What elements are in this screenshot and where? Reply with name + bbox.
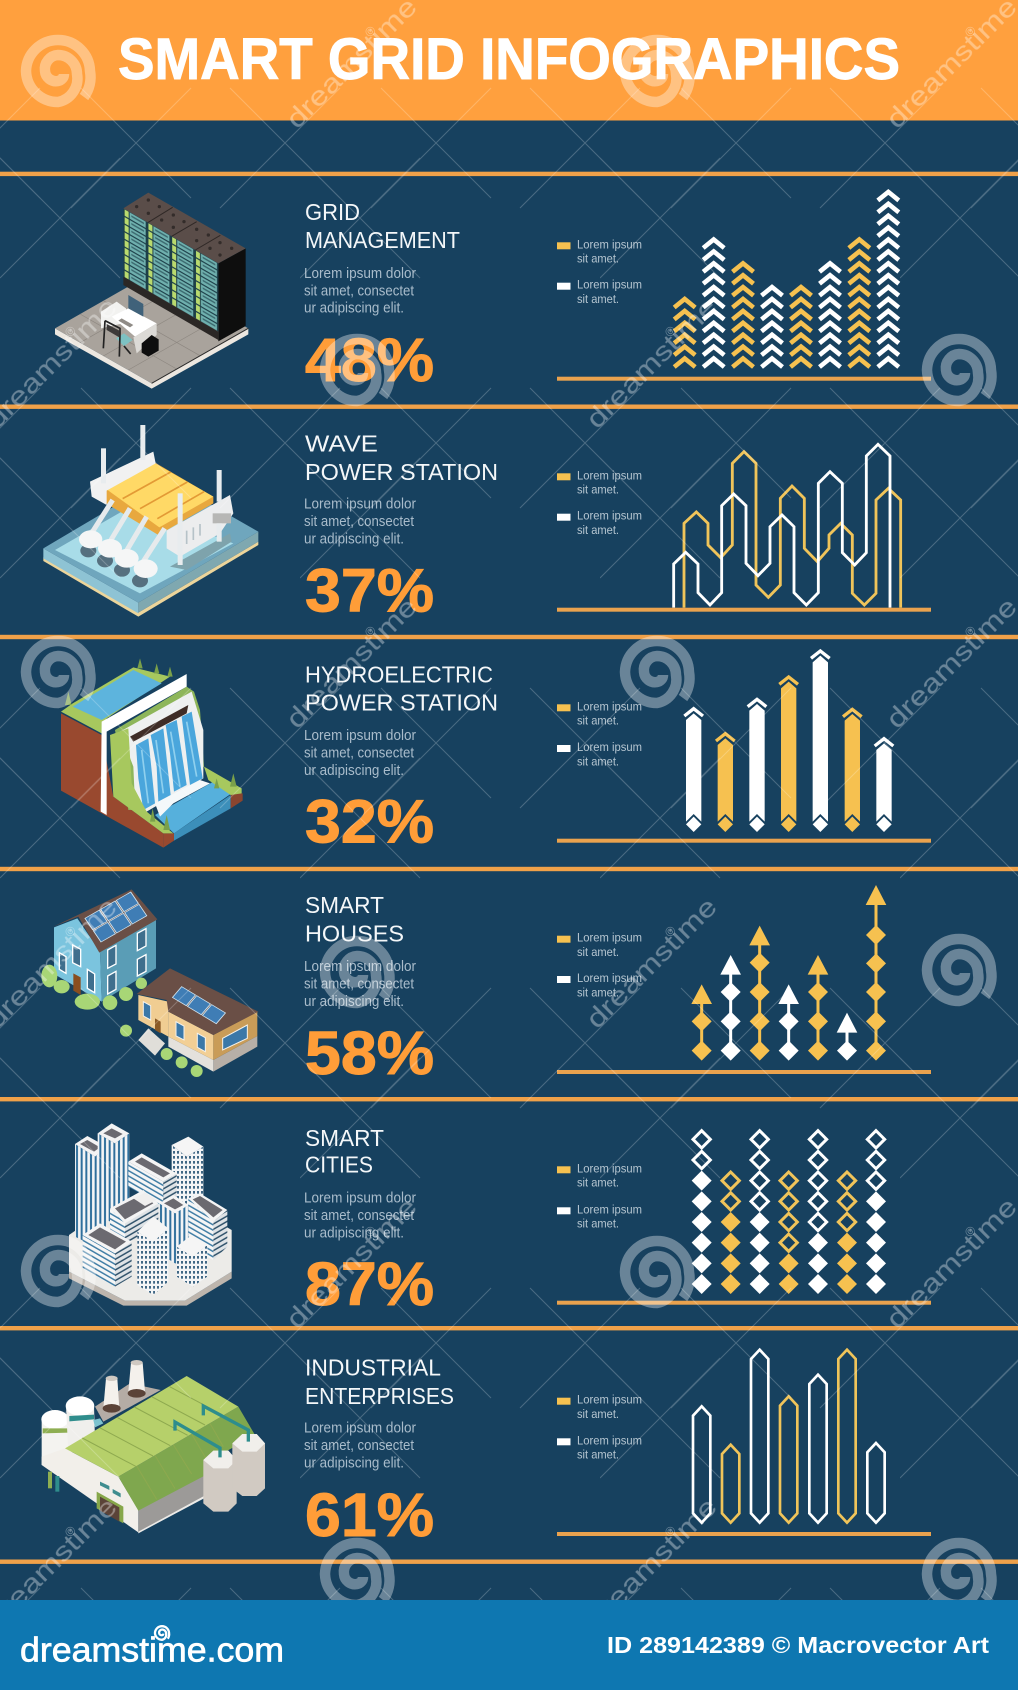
heading: POWER STATION	[305, 690, 498, 716]
heading: CITIES	[305, 1152, 373, 1178]
description: ur adipiscing elit.	[304, 763, 404, 779]
legend: Lorem ipsum	[577, 1393, 642, 1407]
watermark overlay: ©	[962, 22, 979, 40]
watermark overlay: ©	[962, 622, 979, 640]
watermark overlay: dreamstime	[880, 1191, 1018, 1334]
description: sit amet, consectet	[304, 1208, 414, 1224]
legend: Lorem ipsum	[577, 509, 642, 523]
description: sit amet, consectet	[304, 976, 414, 992]
watermark overlay: ©	[662, 922, 679, 940]
legend: Lorem ipsum	[577, 740, 642, 754]
panel: hydroelectric power station	[61, 651, 931, 856]
heading: SMART	[305, 1125, 384, 1151]
legend: Lorem ipsum	[577, 1202, 642, 1216]
chart: chevron columns	[557, 192, 931, 381]
legend: Lorem ipsum	[577, 278, 642, 292]
description: sit amet, consectet	[304, 745, 414, 761]
heading: HOUSES	[305, 921, 404, 947]
percentage: 48%: 48%	[305, 326, 434, 394]
chart: diamond stacks	[557, 1131, 931, 1305]
icon: dam	[61, 658, 243, 848]
watermark overlay: ©	[62, 1522, 79, 1540]
panel: grid management	[55, 192, 931, 394]
watermark overlay: ©	[362, 622, 379, 640]
legend: sit amet.	[577, 523, 619, 537]
heading: WAVE	[305, 431, 378, 457]
description: ur adipiscing elit.	[304, 1225, 404, 1241]
legend: sit amet.	[577, 1448, 619, 1462]
heading: GRID	[305, 199, 360, 225]
watermark overlay: dreamstime	[580, 891, 723, 1034]
legend: Lorem ipsum	[577, 971, 642, 985]
legend: sit amet.	[577, 945, 619, 959]
icon: smart houses	[41, 889, 258, 1077]
chart: hexagon bars	[557, 1350, 931, 1536]
percentage: 58%: 58%	[305, 1019, 434, 1087]
description: sit amet, consectet	[304, 284, 414, 300]
description: ur adipiscing elit.	[304, 1455, 404, 1471]
heading: INDUSTRIAL	[305, 1355, 441, 1381]
chart: diamond arrows	[557, 885, 931, 1074]
legend: Lorem ipsum	[577, 1161, 642, 1175]
legend: sit amet.	[577, 1407, 619, 1421]
title: SMART GRID INFOGRAPHICS	[118, 27, 900, 92]
description: ur adipiscing elit.	[304, 994, 404, 1010]
legend	[557, 699, 642, 768]
watermark overlay: ©	[62, 322, 79, 340]
watermark overlay: dreamstime	[280, 1191, 423, 1334]
description: sit amet, consectet	[304, 514, 414, 530]
panel: smart houses	[41, 885, 931, 1087]
icon: city	[69, 1123, 232, 1306]
chart: arrow bars	[557, 651, 931, 843]
heading: POWER STATION	[305, 459, 498, 485]
watermark overlay: ©	[62, 922, 79, 940]
panel: smart cities	[69, 1123, 931, 1318]
watermark overlay: dreamstime	[880, 591, 1018, 734]
heading: HYDROELECTRIC	[305, 662, 493, 688]
legend: Lorem ipsum	[577, 699, 642, 713]
description: Lorem ipsum dolor	[304, 1191, 416, 1207]
heading: ENTERPRISES	[305, 1383, 454, 1409]
watermark overlay: dreamstime	[280, 0, 423, 134]
description: ur adipiscing elit.	[304, 300, 404, 316]
legend: Lorem ipsum	[577, 237, 642, 251]
legend: Lorem ipsum	[577, 468, 642, 482]
watermark overlay: ©	[662, 322, 679, 340]
footer logo: dreamstime.com	[20, 1632, 284, 1670]
percentage: 61%: 61%	[305, 1481, 434, 1549]
watermark overlay: ©	[362, 22, 379, 40]
legend: sit amet.	[577, 483, 619, 497]
legend	[557, 1393, 642, 1462]
legend: Lorem ipsum	[577, 931, 642, 945]
percentage: 87%: 87%	[305, 1250, 434, 1318]
legend: sit amet.	[577, 754, 619, 768]
percentage: 32%: 32%	[305, 788, 434, 856]
footer bar	[0, 1600, 1018, 1690]
legend	[557, 237, 642, 306]
description: ur adipiscing elit.	[304, 531, 404, 547]
watermark overlay: dreamstime	[580, 1491, 723, 1634]
legend	[557, 1161, 642, 1231]
description: sit amet, consectet	[304, 1438, 414, 1454]
heading: MANAGEMENT	[305, 227, 460, 253]
description: Lorem ipsum dolor	[304, 496, 416, 512]
legend	[557, 931, 642, 1000]
description: Lorem ipsum dolor	[304, 728, 416, 744]
description: Lorem ipsum dolor	[304, 959, 416, 975]
chart: skyline lines	[557, 444, 931, 612]
description: Lorem ipsum dolor	[304, 266, 416, 282]
legend: sit amet.	[577, 986, 619, 1000]
icon: wave power station	[43, 425, 258, 617]
legend: sit amet.	[577, 252, 619, 266]
panel: wave power station	[43, 425, 931, 625]
watermark overlay: ©	[362, 1222, 379, 1240]
watermark overlay: ©	[962, 1222, 979, 1240]
watermark overlay: dreamstime	[280, 591, 423, 734]
percentage: 37%: 37%	[305, 557, 434, 625]
watermark overlay: dreamstime	[880, 0, 1018, 134]
watermark overlay: dreamstime	[580, 291, 723, 434]
heading: SMART	[305, 892, 384, 918]
legend: sit amet.	[577, 714, 619, 728]
watermark overlay: ©	[662, 1522, 679, 1540]
legend	[557, 468, 642, 537]
icon: server room	[55, 193, 248, 389]
icon: factory	[41, 1360, 265, 1533]
header banner	[0, 0, 1018, 120]
legend: sit amet.	[577, 1217, 619, 1231]
legend: sit amet.	[577, 1176, 619, 1190]
image credit: ID 289142389 © Macrovector Art	[607, 1632, 989, 1658]
description: Lorem ipsum dolor	[304, 1420, 416, 1436]
legend: Lorem ipsum	[577, 1433, 642, 1447]
legend: sit amet.	[577, 292, 619, 306]
panel: industrial enterprises	[41, 1350, 931, 1549]
